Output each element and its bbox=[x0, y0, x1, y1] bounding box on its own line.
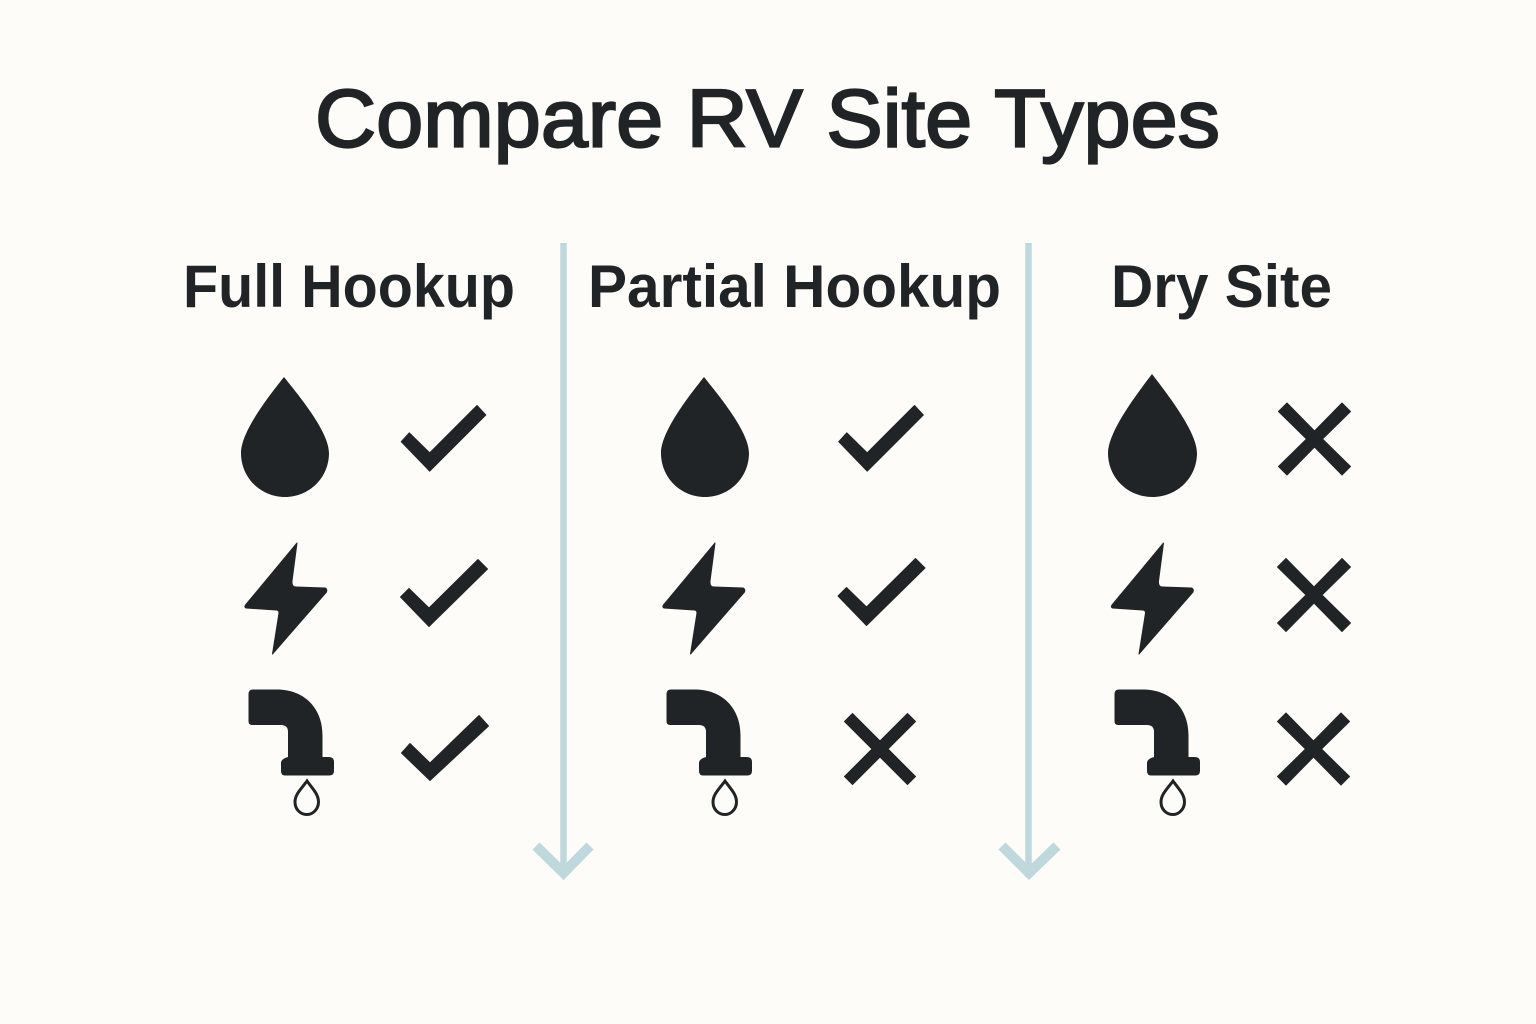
panel: Partial Hookup bbox=[588, 253, 1001, 814]
panel: Dry Site bbox=[1108, 253, 1350, 814]
arrow: divider between Full Hookup and Partial Hookup bbox=[536, 243, 590, 873]
icon: cross, sewer unavailable bbox=[1278, 713, 1350, 785]
icon: sewer faucet with drip bbox=[666, 690, 752, 814]
heading: Partial Hookup: Partial Hookup bbox=[588, 253, 1001, 320]
heading: Dry Site: Dry Site bbox=[1111, 253, 1332, 320]
icon: check, electric available bbox=[838, 558, 925, 626]
heading: Full Hookup: Full Hookup bbox=[183, 253, 515, 320]
icon: lightning bolt bbox=[663, 543, 745, 654]
arrow: divider between Partial Hookup and Dry Site bbox=[1002, 243, 1057, 873]
icon: water drop bbox=[241, 377, 329, 497]
icon: cross, water unavailable bbox=[1278, 403, 1350, 475]
icon: lightning bolt bbox=[1111, 543, 1193, 654]
icon: check, sewer available bbox=[402, 716, 488, 780]
icon: check, water available bbox=[401, 406, 486, 471]
panel: Full Hookup bbox=[183, 253, 515, 814]
icon: sewer faucet with drip bbox=[248, 690, 334, 814]
icon: water drop bbox=[1108, 374, 1197, 497]
icon: check, electric available bbox=[400, 560, 488, 626]
title: Compare RV Site Types bbox=[315, 74, 1220, 164]
icon: check, water available bbox=[839, 406, 923, 471]
icon: cross, sewer unavailable bbox=[844, 714, 916, 784]
icon: sewer faucet with drip bbox=[1114, 690, 1200, 814]
icon: lightning bolt bbox=[245, 543, 327, 654]
icon: water drop bbox=[661, 377, 749, 497]
icon: cross, electric unavailable bbox=[1278, 558, 1350, 632]
